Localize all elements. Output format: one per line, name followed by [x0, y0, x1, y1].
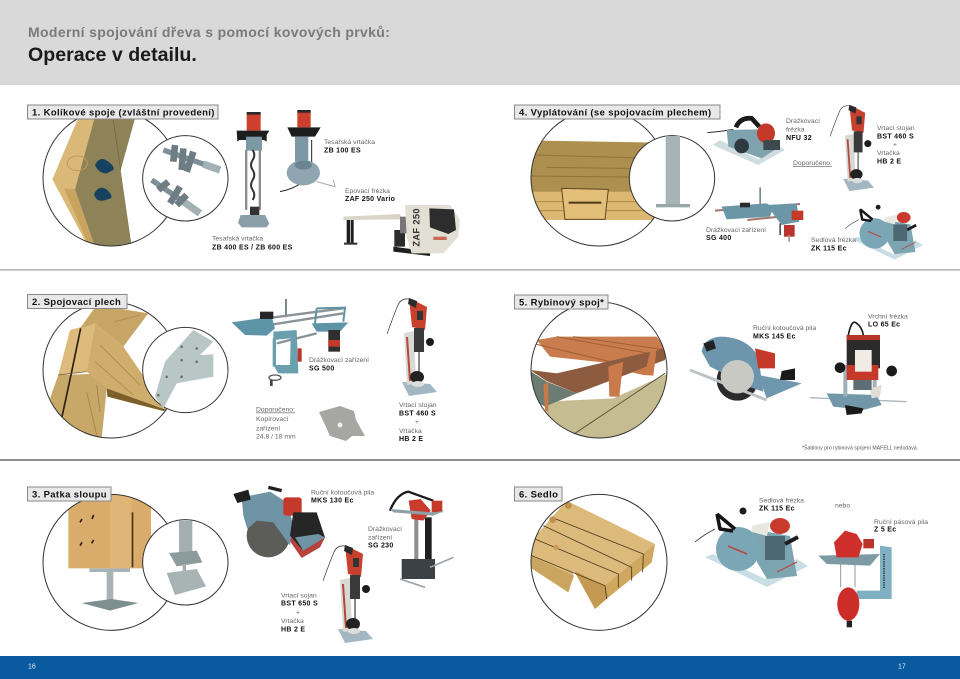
text: BST 650 S label: BST 650 S — [281, 600, 318, 608]
text: or: nebo — [835, 502, 850, 510]
text: BST 460 S label: Vrtací stojan — [877, 125, 915, 132]
text: BST 650 S label: Vrtačka — [281, 618, 304, 625]
text: BST 460 S label: Vrtačka — [877, 150, 900, 157]
text: NFU 32 label: NFU 32 — [786, 135, 812, 142]
text: recommended copying device: 24,8 / 18 mm — [256, 434, 296, 440]
machine: LO 65 Ec router — [810, 322, 907, 415]
heading label 5: 5. Rybinový spoj* — [519, 298, 604, 308]
text: BST 460 S label: + — [893, 142, 897, 148]
machine: ZK 115 Ec saddle cutter — [845, 205, 923, 260]
text: SG 400 label — [706, 227, 766, 242]
text: LO 65 Ec label: LO 65 Ec — [868, 322, 900, 328]
machine: BST 460 S drill stand — [387, 298, 437, 396]
text: BST 460 S label — [399, 402, 437, 443]
machine: SG 230 groove device — [390, 492, 453, 587]
heading label 6 — [514, 487, 562, 501]
panel: section 1 dowel joints — [28, 105, 460, 256]
text: SG 400 label: Drážkovací zařízení — [706, 227, 766, 234]
text: recommended copying device: zařízení — [256, 426, 280, 432]
footer band — [0, 656, 960, 679]
heading label 4: 4. Vyplátování (se spojovacím plechem) — [519, 108, 711, 118]
page number 17: 17 — [898, 664, 906, 670]
text: SG 400 label: SG 400 — [706, 235, 732, 242]
icon: column base close-up — [143, 520, 228, 605]
text: NFU 32 label: frézka — [786, 126, 805, 134]
text: BST 650 S label: HB 2 E — [281, 626, 305, 634]
heading: title: Operace v detailu. — [28, 44, 197, 66]
text: SG 500 label: Drážkovací zařízení — [309, 357, 369, 364]
machine: MKS 145 Ec circular saw — [690, 337, 802, 401]
text: BST 460 S label: BST 460 S — [877, 134, 914, 140]
text: BST 460 S label: HB 2 E — [877, 158, 901, 166]
text: MKS 145 Ec label: MKS 145 Ec — [753, 334, 796, 340]
text: SG 230 label: Drážkovací — [368, 526, 402, 533]
text: footnote: *Šablony pro rybinová spojení MAFELL nedodává. — [802, 444, 918, 452]
machine: BST 460 S drill stand — [830, 105, 874, 191]
machine: ZB 100 ES drill — [280, 110, 335, 192]
illustration: dovetail joint wood detail — [530, 302, 668, 442]
text: NFU 32 label — [786, 118, 820, 142]
heading label 6: 6. Sedlo — [519, 490, 558, 500]
machine: Z 5 Ec band saw — [818, 531, 892, 627]
machine: BST 650 S drill stand — [323, 545, 373, 643]
icon: copying plate — [319, 406, 365, 441]
text: ZB 400 / ZB 600 label: ZB 400 ES / ZB 600 ES — [212, 244, 293, 252]
text: SG 500 label: SG 500 — [309, 366, 335, 372]
machine: ZAF 250 Vario tenon cutter: ZAF 250 — [411, 208, 421, 247]
heading label 2: 2. Spojovací plech — [32, 297, 121, 308]
heading label 3: 3. Patka sloupu — [32, 490, 107, 500]
panel: section 4 half-lap — [514, 105, 923, 260]
icon: T-plate close-up — [629, 136, 715, 221]
text: ZK 115 Ec label — [759, 498, 804, 512]
text: BST 650 S label: + — [296, 610, 300, 616]
text: BST 460 S label: HB 2 E — [399, 436, 423, 443]
machine: NFU 32 groove cutter — [707, 118, 785, 165]
panel: section 3 column base — [28, 487, 453, 643]
text: MKS 130 Ec label — [311, 490, 374, 504]
heading: subtitle: Moderní spojování dřeva s pomocí kovových prvků: — [28, 24, 390, 40]
panel: section 2 connecting plate — [28, 294, 437, 443]
text: ZK 115 Ec label: ZK 115 Ec — [811, 246, 847, 252]
illustration: saddle wood detail — [530, 494, 667, 630]
icon: perforated plate close-up — [143, 327, 228, 413]
text: recommended copying device: Doporučeno: — [256, 406, 295, 414]
machine: ZK 115 Ec saddle cutter — [695, 508, 808, 587]
text: BST 460 S label: Vrtací stojan — [399, 402, 437, 409]
text: ZK 115 Ec label: Sedlová frézka — [811, 237, 856, 244]
machine: MKS 130 Ec circular saw — [233, 487, 325, 558]
text: SG 230 label: SG 230 — [368, 542, 394, 550]
text: MKS 145 Ec label: Ruční kotoučová pila — [753, 325, 816, 332]
heading label 1: 1. Kolíkové spoje (zvláštní provedení) — [32, 108, 215, 118]
text: SG 230 label: zařízení — [368, 534, 392, 542]
text: BST 650 S label: Vrtací sojan — [281, 592, 317, 600]
text: NFU 32 label: Drážkovací — [786, 118, 820, 125]
text: recommended copying device — [256, 406, 296, 440]
machine: SG 500 groove device — [232, 299, 348, 386]
machine: ZAF 250 Vario tenon cutter — [343, 205, 460, 256]
text: ZK 115 Ec label — [811, 237, 856, 252]
text: ZB 400 / ZB 600 label — [212, 236, 293, 252]
text: BST 460 S label — [877, 125, 915, 166]
text: ZB 100 ES label: Tesařská vrtačka — [324, 139, 375, 146]
text: ZK 115 Ec label: Sedlová frézka — [759, 498, 804, 504]
panel: section 6 saddle — [514, 487, 928, 630]
text: BST 650 S label — [281, 592, 318, 634]
machine: SG 400 groove device — [715, 187, 803, 242]
text: ZAF 250 Vario label: Epovací frézka — [345, 188, 390, 195]
text: recommended copying device: Kopírovací — [256, 416, 289, 423]
text: MKS 130 Ec label: MKS 130 Ec — [311, 498, 354, 504]
text: ZB 400 / ZB 600 label: Tesařská vrtačka — [212, 236, 263, 242]
text: MKS 130 Ec label: Ruční kotoučová pila — [311, 490, 374, 496]
illustration: half-lap wood detail — [530, 110, 715, 246]
text: ZK 115 Ec label: ZK 115 Ec — [759, 506, 795, 512]
text: SG 230 label — [368, 526, 402, 550]
page number 16: 16 — [28, 664, 36, 670]
text: ZAF 250 Vario label: ZAF 250 Vario — [345, 196, 395, 203]
text: LO 65 Ec label: Vrchní frézka — [868, 314, 908, 320]
illustration: connecting plate wood detail — [43, 302, 228, 438]
text: MKS 145 Ec label — [753, 325, 816, 340]
text: Z 5 Ec label: Ruční pásová pila — [874, 519, 928, 526]
text: BST 460 S label: BST 460 S — [399, 410, 436, 418]
illustration: dowel joint wood detail — [43, 110, 228, 247]
panel: section 5 dovetail — [514, 295, 918, 452]
text: BST 460 S label: Vrtačka — [399, 428, 422, 435]
text: recommended label: Doporučeno: — [793, 160, 832, 167]
text: SG 500 label — [309, 357, 369, 372]
text: ZB 100 ES label — [324, 139, 375, 154]
icon: dowel connectors close-up — [143, 136, 228, 221]
text: ZB 100 ES label: ZB 100 ES — [324, 148, 361, 154]
header band — [0, 0, 960, 85]
text: Z 5 Ec label: Z 5 Ec — [874, 526, 896, 534]
text: ZAF 250 Vario label — [345, 188, 395, 203]
text: Z 5 Ec label — [874, 519, 928, 534]
text: BST 460 S label: + — [415, 419, 419, 426]
machine: ZB 400 ES drill — [237, 112, 269, 227]
illustration: column base wood detail — [43, 489, 228, 630]
text: LO 65 Ec label — [868, 314, 908, 328]
